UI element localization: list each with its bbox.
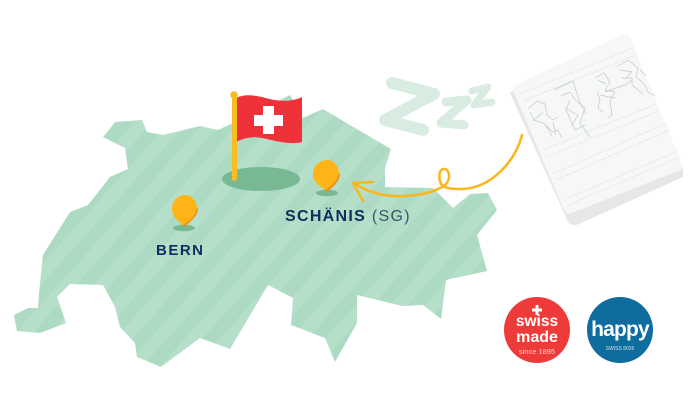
badge: swiss made: swiss (516, 313, 558, 330)
badge: swiss made: made (516, 329, 558, 346)
badge: swiss made: since 1895 (519, 347, 555, 356)
zzz sleep symbols (385, 83, 492, 130)
badge: happy: SWISS 9026 (606, 346, 635, 352)
label: Bern: BERN (156, 242, 205, 259)
swiss flag (230, 91, 302, 181)
notebook (510, 34, 683, 225)
pin: Bern (172, 195, 198, 231)
label: Schänis (SG): SCHÄNIS (SG) (285, 207, 411, 225)
pin: Schänis (313, 160, 340, 196)
map of Switzerland (14, 95, 497, 367)
flag ellipse shadow (222, 167, 300, 191)
badge: happy: happy (591, 318, 650, 341)
sketched figures (528, 60, 655, 138)
badge: happy (587, 297, 653, 363)
badge: swiss made (504, 297, 570, 363)
curly arrow (353, 135, 522, 201)
